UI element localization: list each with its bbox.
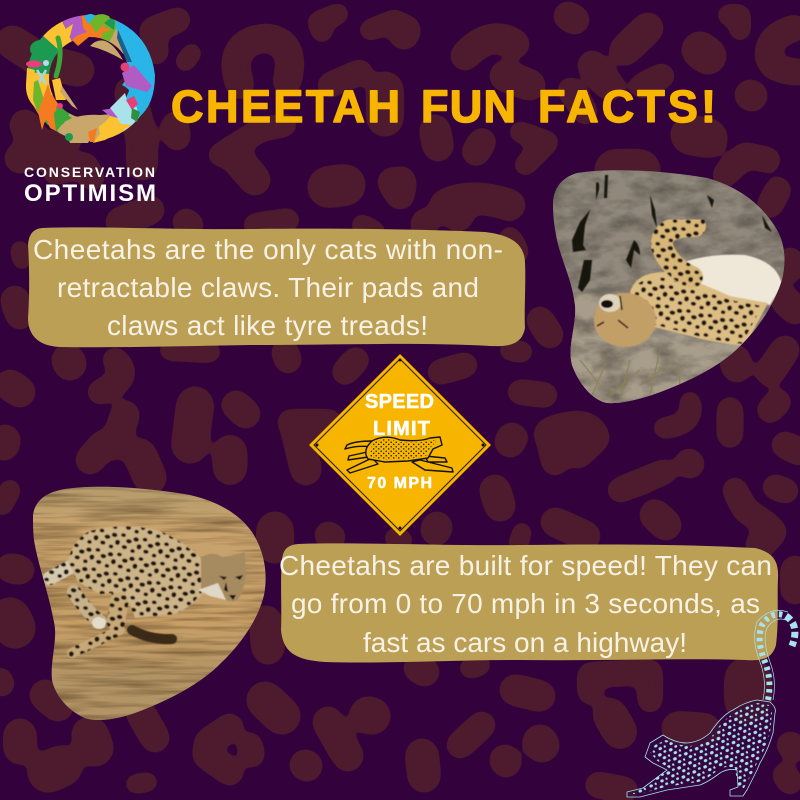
sand foreground: [570, 292, 742, 404]
sign text: LIMIT: [373, 418, 430, 440]
fact panel: speed: fast as cars on a highway!: [363, 627, 687, 658]
fact panel: claws: Cheetahs are the only cats with non-: [33, 234, 503, 265]
speed limit sign: [309, 354, 491, 536]
rock cracks: [572, 175, 772, 292]
logo: Conservation Optimism animal ring: [26, 14, 155, 143]
body: [627, 700, 775, 797]
cheetah: [50, 526, 246, 653]
fact panel: speed: [279, 543, 778, 663]
title: CHEETAH: [171, 81, 400, 132]
sign text: SPEED: [365, 391, 434, 413]
title: FUN: [421, 81, 516, 132]
dry grass: [580, 350, 680, 400]
sign text: [365, 391, 434, 492]
sign text: 70 MPH: [367, 475, 432, 492]
title: FACTS!: [538, 81, 716, 132]
fact panel: claws: [28, 227, 525, 347]
title: [171, 81, 716, 132]
fact panel: speed: go from 0 to 70 mph in 3 seconds, as: [291, 588, 760, 619]
logo wordmark: OPTIMISM: [24, 180, 156, 207]
logo wordmark: CONSERVATION: [24, 164, 155, 180]
logo wordmark: [24, 164, 156, 207]
cheetah: [594, 226, 782, 347]
fact panel: claws: retractable claws. Their pads and: [57, 272, 479, 303]
tail: [755, 610, 795, 700]
illustration: stretching leopard: [627, 610, 795, 797]
fact panel: speed: Cheetahs are built for speed! They can: [279, 550, 772, 581]
photo: cheetah running: [33, 486, 266, 720]
fact panel: claws: claws act like tyre treads!: [107, 310, 428, 341]
photo: cheetah rolling on its back: [553, 170, 784, 404]
icon: running cheetah: [345, 437, 453, 473]
